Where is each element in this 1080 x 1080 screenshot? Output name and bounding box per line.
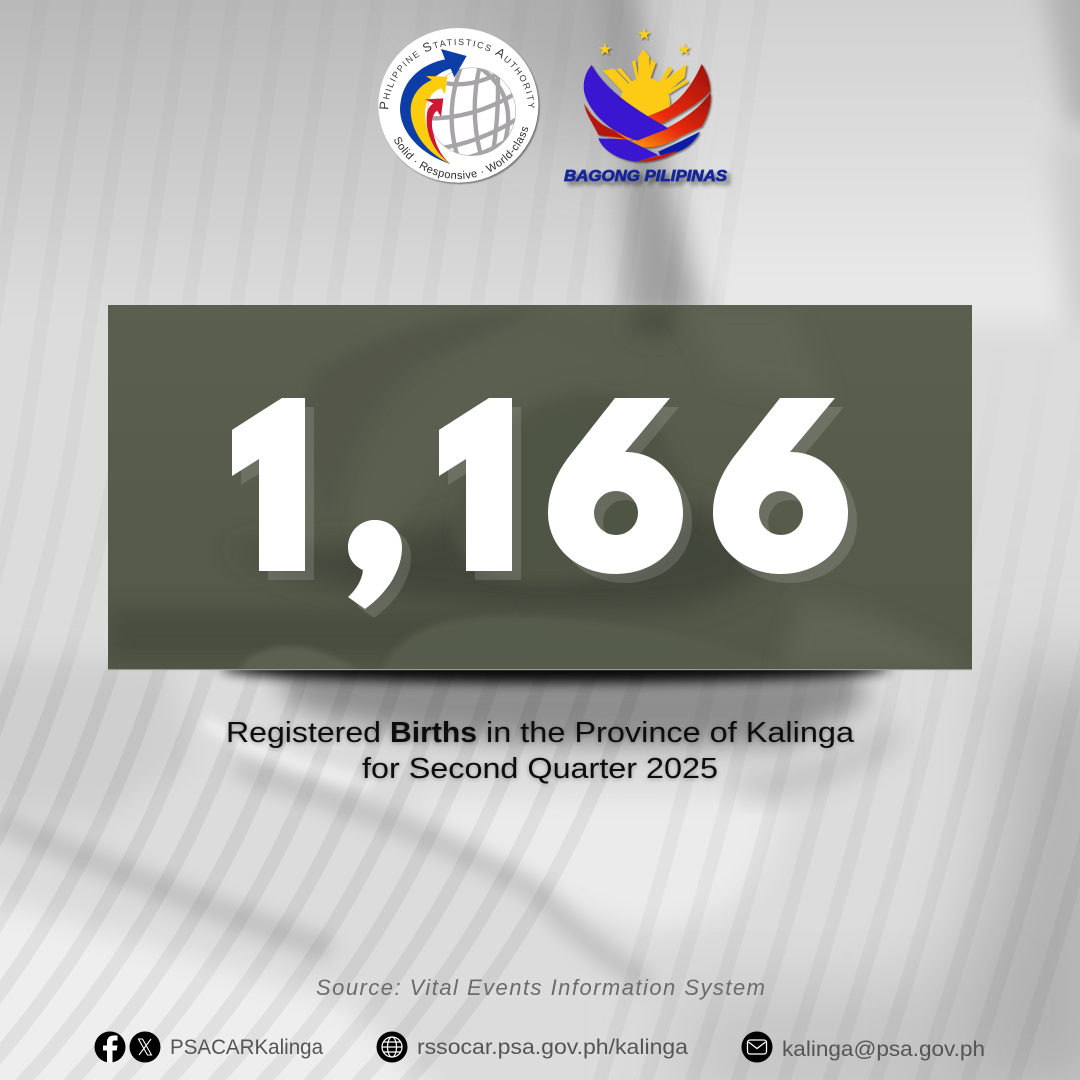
- big number shadow: 6: [553, 373, 696, 623]
- big number shadow: 1: [416, 358, 583, 626]
- icon: three stars: ★: [677, 42, 692, 59]
- caption: [226, 717, 855, 785]
- icon: woven bands: [607, 64, 710, 141]
- icon: three stars: ★: [598, 42, 612, 59]
- website text: rssocar.psa.gov.ph/kalinga: [417, 1036, 688, 1059]
- footer: email: [742, 1032, 985, 1062]
- big number shadow: 1: [209, 358, 376, 626]
- caption: in the Province of Kalinga: [486, 717, 855, 749]
- caption: Births: [390, 717, 477, 749]
- big number 1,166: 6: [544, 364, 687, 614]
- icon: globe: [376, 1032, 408, 1062]
- big number shadow: [241, 407, 857, 618]
- logo: Philippine Statistics Authority seal: PHILIPPINE STATISTICS AUTHORITY: [380, 38, 535, 109]
- email text: kalinga@psa.gov.ph: [782, 1038, 985, 1061]
- icon: envelope: [742, 1032, 772, 1062]
- icon: X: [130, 1032, 160, 1062]
- big number 1,166: 1: [407, 349, 574, 617]
- logo: Philippine Statistics Authority seal: [378, 28, 540, 185]
- icon: three stars: ★: [637, 27, 652, 44]
- icon: sun and rays: [603, 49, 688, 128]
- handle text: PSACARKalinga: [170, 1036, 323, 1059]
- big number 1,166: [232, 398, 848, 609]
- caption: Registered: [226, 717, 381, 749]
- wordmark: BAGONG PILIPINAS: BAGONG PILIPINAS: [564, 168, 727, 185]
- big number 1,166: 6: [709, 364, 852, 614]
- panel shadow: [220, 653, 890, 683]
- source line: Source: Vital Events Information System: [316, 975, 765, 1000]
- icon: facebook: [94, 1032, 126, 1062]
- caption: for Second Quarter 2025: [362, 753, 718, 785]
- logo: Bagong Pilipinas: [584, 27, 711, 162]
- logo: Philippine Statistics Authority seal: Solid · Responsive · World-class: [394, 126, 528, 180]
- big number shadow: 6: [718, 373, 861, 623]
- photo of baby fingers in panel: [108, 305, 972, 672]
- big number 1,166: ,: [332, 275, 418, 622]
- footer: website: [376, 1032, 688, 1062]
- panel: headline figure: [108, 305, 972, 672]
- big number shadow: ,: [341, 284, 427, 631]
- big number 1,166: 1: [200, 349, 367, 617]
- footer: social handle: [94, 1032, 323, 1062]
